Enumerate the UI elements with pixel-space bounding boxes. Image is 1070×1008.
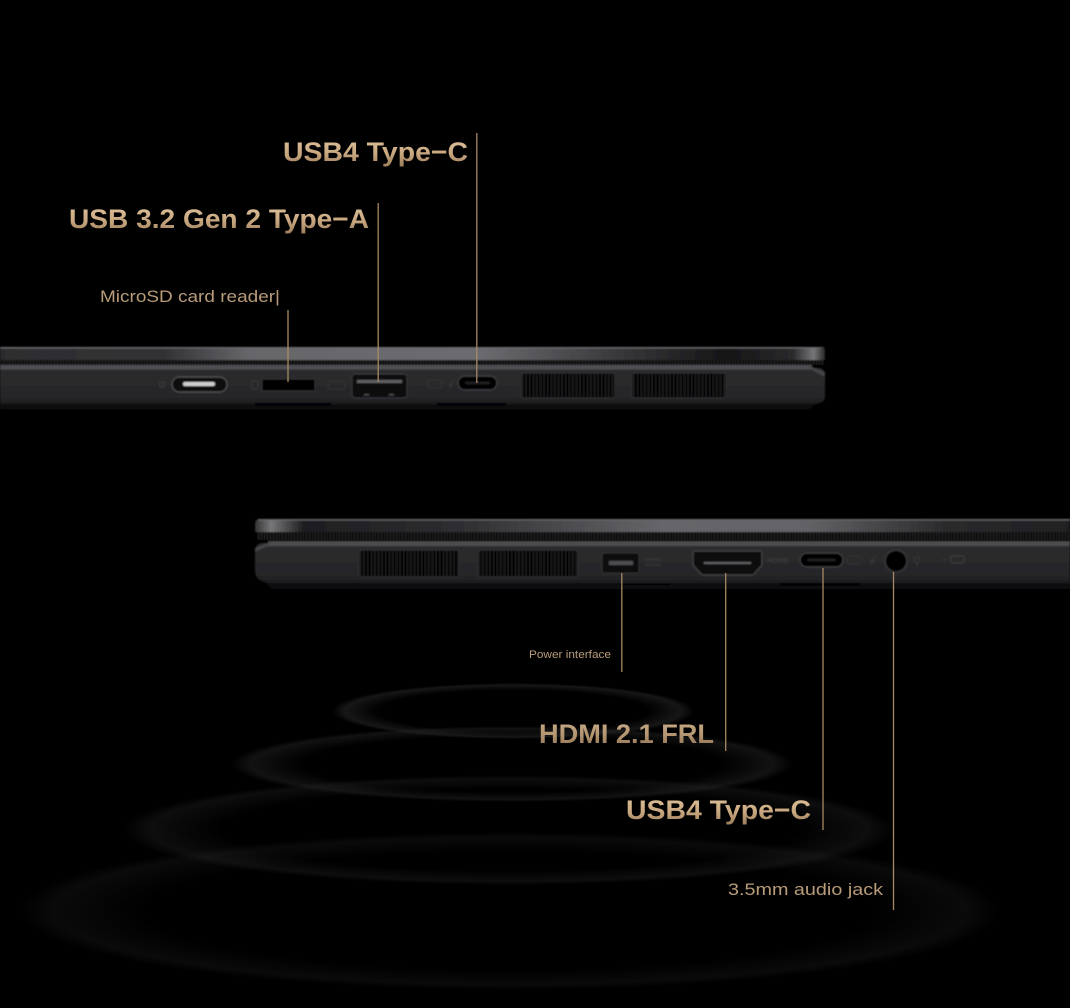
laptop side view: left ports: [0, 347, 825, 418]
DC power port: [602, 553, 661, 573]
power button: [159, 377, 227, 392]
HDMI port: HDMI: [767, 558, 788, 565]
concentric sound wave rings: [19, 683, 1001, 990]
USB-C port: [427, 376, 497, 390]
label: USB4 Type-C bottom: USB4 Type−C: [626, 795, 811, 825]
laptop 1 vents: [521, 373, 726, 398]
USB-C port right: [800, 553, 876, 567]
label: MicroSD card reader: MicroSD card reader|: [100, 287, 280, 306]
laptop side view: right ports: [255, 519, 1070, 600]
label: power interface: Power interface: [529, 649, 611, 661]
laptop 1 lower shadow edge: [0, 400, 820, 418]
USB-A port: [328, 374, 407, 398]
laptop 1 body: [0, 368, 825, 404]
label: USB4 Type-C top: USB4 Type−C: [283, 137, 468, 167]
audio jack: [885, 550, 920, 572]
leader lines: [288, 133, 894, 910]
label: 3.5mm audio jack: 3.5mm audio jack: [728, 880, 884, 899]
HDMI port: [693, 551, 788, 575]
laptop 2 vents: [359, 550, 578, 577]
microSD slot: [252, 379, 315, 391]
laptop 2 lid band: [255, 519, 1070, 532]
battery indicator: [943, 556, 964, 563]
laptop 2 hinge grille: [256, 532, 1070, 540]
label: USB 3.2 Gen 2 Type-A: USB 3.2 Gen 2 Type−A: [69, 204, 369, 234]
laptop 2 lower shadow edge: [262, 578, 1070, 600]
laptop 2 body: [255, 543, 1070, 583]
laptop 1 hinge grille: [0, 360, 824, 365]
laptop 1 lid band: [0, 347, 825, 360]
label: HDMI 2.1 FRL: HDMI 2.1 FRL: [539, 719, 714, 749]
